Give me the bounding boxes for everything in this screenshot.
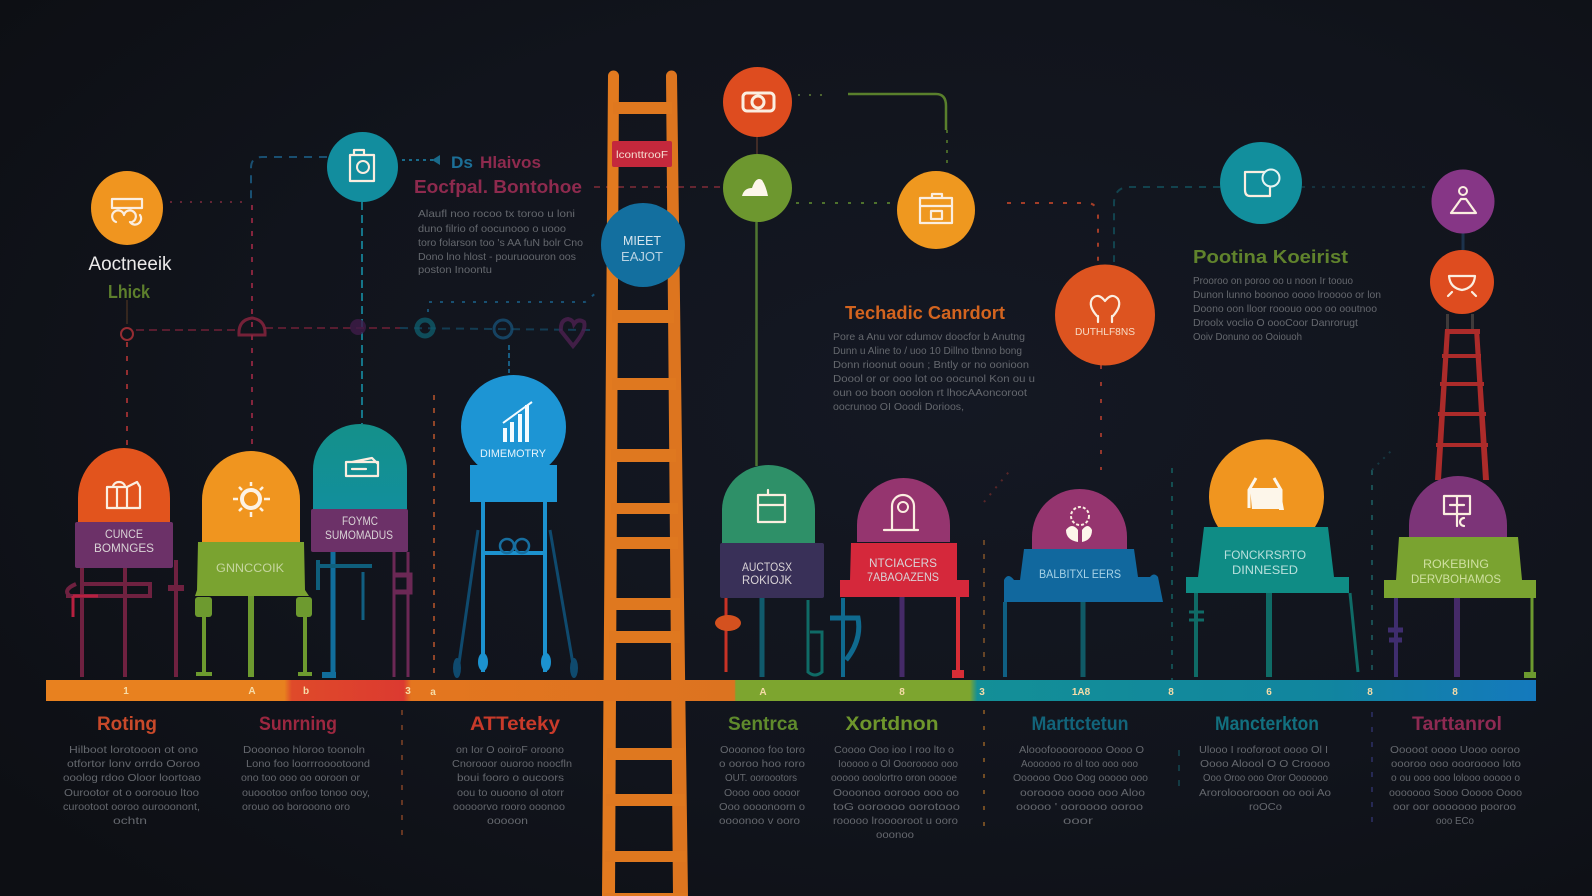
text block: top-left: Eocfpal. Bontohoe (414, 177, 582, 197)
circle: green cloud (723, 154, 792, 222)
column 6: Marttctetun (1013, 714, 1148, 827)
timeline bar: 8 (1367, 687, 1373, 698)
column 5: Xortdnon: Iooooo o Ol Oooroooo ooo (838, 758, 958, 770)
timeline bar: 3 (979, 687, 985, 698)
pedestal 2: yellow dome: GNNCCOIK (216, 563, 284, 575)
pedestal 1: orange dome (66, 448, 184, 677)
circle: teal document (327, 132, 398, 202)
pedestal 3: teal dome (311, 424, 410, 678)
column 3: Atteteky: ooooorvo rooro ooonoo (453, 801, 565, 813)
column 2: Sunming (241, 714, 370, 813)
timeline bar: 8 (1168, 687, 1174, 698)
column 5: Xortdnon: ooooo ooolortro oron ooooe (831, 772, 957, 784)
label: Aoctneeik: Aoctneeik (88, 254, 172, 275)
text block: top-left: Dono lno hlost - pouruoouron oos (418, 251, 576, 263)
column 1: Roting: Hilboot lorotooon ot ono (69, 744, 198, 756)
text block: top-left: Alaufl noo rocoo tx toroo u loni (418, 208, 575, 220)
circle: red-orange heart (1055, 264, 1155, 366)
column 7: Mancterkton: Oooo Aloool O O Croooo (1200, 758, 1330, 770)
pedestal 9: magenta dome, green base: DERVBOHAMOS (1411, 574, 1501, 586)
ladder: central orange (602, 70, 688, 896)
pedestal 4: blue dome (453, 375, 578, 678)
text block: center: Pore a Anu vor cdumov doocfor b Anutng (833, 331, 1025, 343)
text block: top-left (414, 153, 583, 276)
column 5: Xortdnon: ooonoo (876, 829, 914, 841)
column 3: Atteteky (452, 714, 572, 827)
circle: blue ladder callout: EAJOT (621, 249, 663, 264)
column 6: Marttctetun: ooooo ' ooroooo ooroo (1016, 801, 1143, 813)
pedestal 5: green dome: ROKIOJK (742, 575, 792, 587)
column 6: Marttctetun: ooor (1063, 815, 1094, 827)
column 6: Marttctetun: Oooooo Ooo Oog ooooo ooo (1013, 772, 1148, 784)
column 5: Xortdnon: rooooo lrooooroot u ooro (833, 815, 958, 827)
text block: center: Donn rioonut ooun ; Bntly or no oonioon (833, 359, 1029, 371)
column 8: Tarttanrol (1389, 714, 1522, 827)
circle: blue ladder callout (601, 203, 685, 287)
circle: red-orange bowl (1430, 250, 1494, 314)
text block: right (1193, 247, 1381, 343)
ladder label tag (612, 141, 672, 167)
text block: top-left: duno filrio of oocunooo o uooo (418, 223, 566, 235)
pedestal 3: teal dome: FOYMC (342, 516, 378, 528)
text block: top-left: poston Inoontu (418, 264, 492, 276)
column 6: Marttctetun: ooroooo oooo ooo Aloo (1020, 787, 1145, 799)
column 7: Mancterkton: roOCo (1249, 801, 1282, 813)
pedestal 1: orange dome: CUNCE (105, 529, 143, 541)
pedestal 3: teal dome: SUMOMADUS (325, 530, 393, 542)
column 2: Sunming: ouoootoo onfoo tonoo ooy, (242, 787, 370, 799)
text block: right: Pootina Koeirist (1193, 247, 1348, 267)
pedestal 6: magenta dome, red base: NTCIACERS (869, 558, 937, 570)
text block: center: oocrunoo OI Ooodi Dorioos, (833, 401, 964, 413)
column 7: Mancterkton: Ulooo I rooforoot oooo Ol I (1199, 744, 1328, 756)
timeline bar: b (303, 686, 309, 697)
column 4: Scrittca: Oooo ooo oooor (724, 787, 800, 799)
timeline bar: 8 (1452, 687, 1458, 698)
pedestal 8: yellow dome, teal base (1186, 439, 1358, 677)
circle: blue ladder callout: MIEET (623, 233, 661, 248)
column 3: Atteteky: Cnorooor ouoroo noocfln (452, 758, 572, 770)
pedestal 9: magenta dome, green base: ROKEBING (1423, 559, 1489, 571)
column 7: Mancterkton: Mancterkton (1215, 714, 1319, 735)
column 1: Roting: Ourootor ot o ooroouo ltoo (64, 787, 199, 799)
column 2: Sunming: Lono foo loorrrooootoond (246, 758, 370, 770)
pedestal 7: magenta dome, blue base: BALBITXL EERS (1039, 569, 1121, 581)
column 3: Atteteky: on Ior O ooiroF oroono (456, 744, 564, 756)
column 7: Mancterkton: Arorolooorooon oo ooi Ao (1199, 787, 1331, 799)
pedestal 4: blue dome: DIMEMOTRY (480, 448, 547, 460)
timeline bar: A (248, 686, 256, 697)
column 8: Tarttanrol: oooroo ooo oooroooo loto (1391, 758, 1521, 770)
pedestal 8: yellow dome, teal base: FONCKRSRTO (1224, 550, 1306, 562)
text block: top-left: toro folarson too 's AA fuN bolr Cno (418, 237, 583, 249)
pedestal 9: magenta dome, green base (1384, 476, 1536, 678)
text block: right: Droolx voclio O oooCoor Danrorugt (1193, 317, 1358, 329)
column 4: Scrittca: OUT. ooroootors (725, 772, 797, 784)
column 1: Roting: ooolog rdoo Oloor loortoao (63, 772, 201, 784)
timeline bar: 6 (1266, 687, 1272, 698)
text block: right: Prooroo on poroo oo u noon Ir toouo (1193, 275, 1353, 287)
network node icons (121, 155, 585, 346)
column 2: Sunming: Sunrning (259, 714, 337, 735)
column 1: Roting: ochtn (113, 815, 147, 827)
pedestal 5: green dome: AUCTOSX (742, 562, 792, 574)
pedestal 5: green dome (715, 465, 824, 677)
text block: center: Doool or or ooo lot oo oocunol Kon ou u (833, 373, 1035, 385)
text block: center: Techadic Canrdort (845, 303, 1005, 323)
column 5: Xortdnon: Coooo Ooo ioo I roo lto o (834, 744, 954, 756)
column 8: Tarttanrol: oor oor ooooooo pooroo (1393, 801, 1516, 813)
column 8: Tarttanrol: ooo ECo (1436, 815, 1474, 827)
timeline bar: 8 (899, 687, 905, 698)
text block: center: Dunn u Aline to / uoo 10 Dillno tbnno bong (833, 345, 1022, 357)
column 3: Atteteky: ooooon (487, 815, 528, 827)
text block: right: Doono oon lloor rooouo ooo oo ooutnoo (1193, 303, 1377, 315)
column 5: Xortdnon (831, 714, 960, 841)
column 8: Tarttanrol: Ooooot oooo Uooo ooroo (1390, 744, 1520, 756)
circle: orange top-left (91, 171, 163, 245)
text block: center (833, 303, 1035, 413)
text block: top-left: Hlaivos (480, 153, 541, 172)
circle: teal chat clock (1220, 142, 1302, 224)
column 6: Marttctetun: Alooofooooroooo Oooo O (1019, 744, 1144, 756)
column 2: Sunming: Dooonoo hloroo toonoln (243, 744, 365, 756)
column 3: Atteteky: oou to ouoono ol otorr (457, 787, 565, 799)
column 4: Scrittca: o ooroo hoo roro (719, 758, 805, 770)
column 4: Scrittca: Oooonoo foo toro (720, 744, 805, 756)
column 7: Mancterkton: Ooo Oroo ooo Oror Ooooooo (1203, 772, 1328, 784)
ladder label tag: lconttrooF (616, 149, 668, 161)
pedestal 2: yellow dome (195, 451, 312, 677)
pedestal 6: magenta dome, red base: 7ABAOAZENS (867, 572, 939, 584)
circle: purple weight (1432, 170, 1494, 234)
text block: right: Ooiv Donuno oo Ooiouoh (1193, 331, 1302, 343)
column 8: Tarttanrol: o ou ooo ooo lolooo ooooo o (1391, 772, 1520, 784)
column 4: Scrittca: Ooo oooonoorn o (719, 801, 805, 813)
timeline bar: 1 (123, 686, 129, 697)
column 2: Sunming: orouo oo borooono oro (242, 801, 350, 813)
timeline bar: 3 (405, 686, 411, 697)
pedestal 1: orange dome: BOMNGES (94, 543, 154, 555)
column 4: Scrittca (719, 714, 805, 827)
column 6: Marttctetun: Marttctetun (1032, 714, 1128, 735)
column 5: Xortdnon: Xortdnon (846, 714, 938, 735)
text block: top-left: Ds (451, 153, 473, 172)
timeline bar: a (430, 687, 436, 698)
circle: red-orange camera (723, 67, 792, 137)
pedestal 8: yellow dome, teal base: DINNESED (1232, 565, 1298, 577)
column 3: Atteteky: ATTeteky (470, 714, 560, 735)
label: Lhick: Lhick (108, 282, 151, 302)
column 4: Scrittca: Sentrca (728, 714, 798, 735)
column 5: Xortdnon: toG ooroooo oorotooo (833, 801, 960, 813)
column 7: Mancterkton (1199, 714, 1331, 813)
text block: center: oun oo boon ooolon rt lhocAAoncoroot (833, 387, 1027, 399)
small red ladder (1435, 314, 1489, 480)
column 1: Roting: curootoot ooroo ourooonont, (63, 801, 200, 813)
pedestal 6: magenta dome, red base (830, 478, 969, 678)
connector lines (127, 94, 1463, 845)
column 1: Roting: otfortor lonv orrdo Ooroo (67, 758, 200, 770)
pedestal 7: magenta dome, blue base (1004, 489, 1163, 677)
column 2: Sunming: ono too ooo oo ooroon or (241, 772, 361, 784)
timeline bar: A (759, 687, 767, 698)
column 5: Xortdnon: Oooonoo oorooo ooo oo (833, 787, 959, 799)
column 1: Roting (63, 714, 201, 827)
timeline bar: 1A8 (1072, 687, 1091, 698)
column 4: Scrittca: oooonoo v ooro (719, 815, 800, 827)
column 6: Marttctetun: Aoooooo ro ol too ooo ooo (1021, 758, 1138, 770)
timeline bar (46, 680, 1536, 701)
column 8: Tarttanrol: ooooooo Sooo Ooooo Oooo (1389, 787, 1522, 799)
column 1: Roting: Roting (97, 714, 157, 735)
column 8: Tarttanrol: Tarttanrol (1412, 714, 1502, 735)
circle: red-orange heart: DUTHLF8NS (1075, 327, 1135, 338)
circle: orange calendar (897, 171, 975, 249)
text block: right: Dunon lunno boonoo oooo lrooooo or lon (1193, 289, 1381, 301)
column 3: Atteteky: boui fooro o oucoors (457, 772, 564, 784)
